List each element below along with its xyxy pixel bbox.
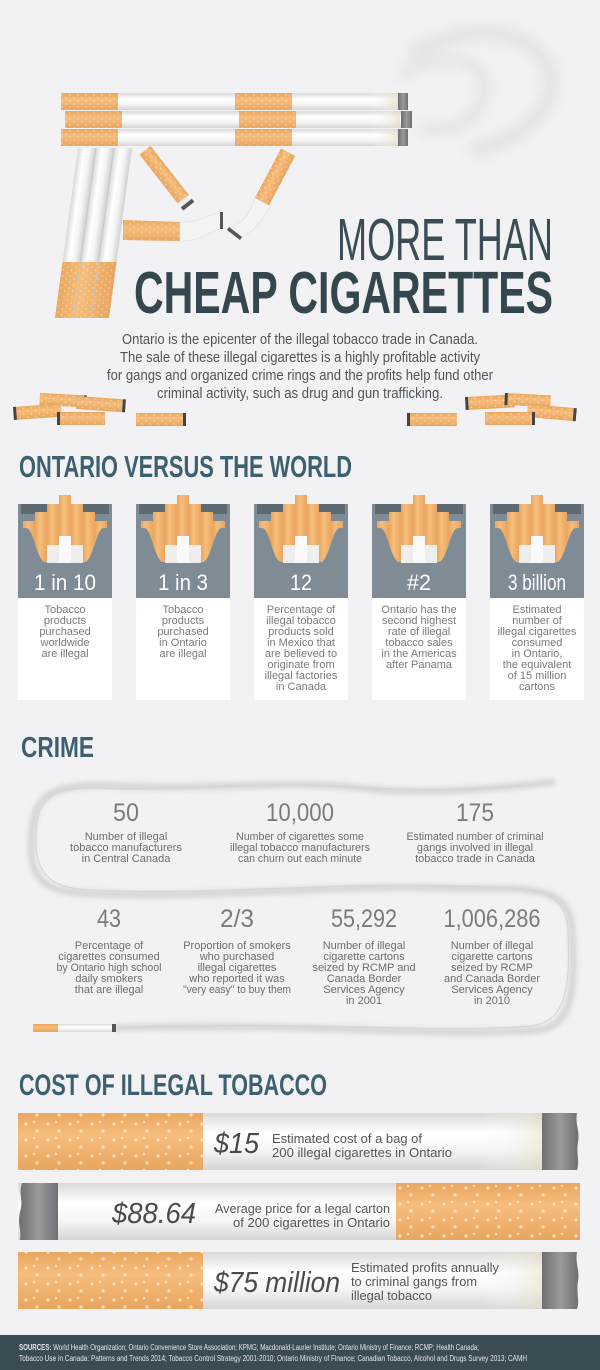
stat: 2/3: illegal cigarettes xyxy=(198,962,277,974)
intro paragraph: criminal activity, such as drug and gun trafficking. xyxy=(157,385,443,402)
panel: 1 in 3: in Ontario xyxy=(159,637,207,649)
panel: 1 in 10 xyxy=(18,495,112,700)
panel: 3 billion: consumed xyxy=(512,637,562,649)
stat: 55,292: Number of illegal xyxy=(323,940,405,952)
stat: 1,006,286: 1,006,286 xyxy=(444,905,540,933)
panel: 12: Percentage of xyxy=(267,604,336,616)
panel: 1 in 10: 1 in 10 xyxy=(34,570,96,595)
panel: 1 in 10: products xyxy=(44,615,87,627)
stat: 175: tobacco trade in Canada xyxy=(415,853,536,865)
stat: 175: gangs involved in illegal xyxy=(417,842,533,854)
panel: 1 in 3: Tobacco xyxy=(163,604,203,616)
heading: Ontario versus the world: ONTARIO VERSUS THE WORLD xyxy=(19,449,352,484)
intro paragraph xyxy=(107,331,493,402)
panel: #2 xyxy=(372,495,466,700)
intro paragraph: Ontario is the epicenter of the illegal tobacco trade in Canada. xyxy=(122,331,478,348)
illustration: cigarette gun xyxy=(55,93,412,318)
panel: #2: second highest xyxy=(382,615,456,627)
stat: 50: 50 xyxy=(113,799,139,827)
stat: 55,292: in 2001 xyxy=(346,995,382,1007)
crime stats row 1 xyxy=(70,799,544,865)
stat: 43 xyxy=(56,905,162,996)
cost bar: $15: Estimated cost of a bag of xyxy=(272,1131,422,1146)
stat: 10,000: can churn out each minute xyxy=(238,853,362,865)
intro paragraph: The sale of these illegal cigarettes is a highly profitable activity xyxy=(120,349,480,366)
stat: 175: 175 xyxy=(456,799,494,827)
stat: 43: by Ontario high school xyxy=(56,962,162,974)
stat: 2/3: who purchased xyxy=(199,951,274,963)
panel: 12: are believed to xyxy=(265,648,337,660)
panel: 3 billion: cartons xyxy=(519,681,556,693)
panel: #2: rate of illegal xyxy=(388,626,450,638)
stat: 175 xyxy=(406,799,544,865)
gun grip xyxy=(55,148,132,318)
crime stats row 2 xyxy=(56,905,540,1007)
stat: 2/3: "very easy" to buy them xyxy=(183,984,291,996)
smoke trail around crime stats xyxy=(31,782,573,1032)
stat: 55,292: Canada Border xyxy=(327,973,402,985)
cost bar: $75 million: $75 million xyxy=(213,1267,340,1299)
stat: 2/3: 2/3 xyxy=(220,905,254,933)
panel: #2: after Panama xyxy=(386,659,453,671)
stat: 43: 43 xyxy=(97,905,121,933)
stat: 55,292 xyxy=(312,905,416,1007)
panel: 12: originate from xyxy=(267,659,335,671)
stat: 50: Number of illegal xyxy=(85,831,167,843)
heading: cost of illegal tobacco: COST OF ILLEGAL TOBACCO xyxy=(19,1069,327,1102)
panel: 3 billion: the equivalent xyxy=(503,659,571,671)
stat: 50 xyxy=(70,799,182,865)
broken cigarettes xyxy=(123,149,295,241)
panel: 3 billion: 3 billion xyxy=(508,570,566,595)
panel: 3 billion: of 15 million xyxy=(508,670,566,682)
cost bar: $88.64 xyxy=(18,1183,580,1240)
cost bar: $75 million xyxy=(18,1252,578,1309)
panel: 12: in Mexico that xyxy=(267,637,335,649)
panel: 1 in 10: purchased xyxy=(39,626,91,638)
stat: 43: daily smokers xyxy=(75,973,143,985)
panel: #2: in the Americas xyxy=(381,648,457,660)
cost bar: $15: $15 xyxy=(213,1128,260,1160)
cost bar: $15 xyxy=(18,1113,578,1170)
stat: 43: Percentage of xyxy=(75,940,144,952)
cost bar: $88.64: Average price for a legal carton xyxy=(215,1201,390,1216)
panel: #2: Ontario has the xyxy=(381,604,457,616)
panel: 3 billion: in Ontario, xyxy=(512,648,562,660)
panel: #2: #2 xyxy=(407,570,431,595)
panel: 1 in 3: 1 in 3 xyxy=(158,570,208,595)
panel: 1 in 3: purchased xyxy=(157,626,209,638)
panel: 12 xyxy=(254,495,348,700)
stat: 2/3 xyxy=(183,905,291,996)
cigarette butts pile xyxy=(13,393,577,426)
stat: 50: tobacco manufacturers xyxy=(70,842,182,854)
panel: 1 in 3 xyxy=(136,495,230,700)
stat: 10,000 xyxy=(230,799,370,865)
stat: 55,292: cigarette cartons xyxy=(323,951,405,963)
heading: crime: CRIME xyxy=(21,732,94,764)
panel: 3 billion: Estimated xyxy=(513,604,561,616)
panel: 3 billion: number of xyxy=(512,615,563,627)
stat: 1,006,286 xyxy=(444,905,540,1007)
panel: 12: products sold xyxy=(268,626,334,638)
cost bar: $75 million: Estimated profits annually xyxy=(351,1260,499,1275)
panel: 3 billion xyxy=(490,495,584,700)
cost bar: $15: 200 illegal cigarettes in Ontario xyxy=(272,1145,452,1160)
stat: 1,006,286: cigarette cartons xyxy=(451,951,533,963)
panel: 1 in 3: products xyxy=(162,615,205,627)
icon: small burning cigarette xyxy=(33,1024,116,1032)
smoke: top right xyxy=(400,33,551,150)
stat: 175: Estimated number of criminal xyxy=(406,831,544,843)
title xyxy=(134,207,553,326)
footer: sources xyxy=(0,1335,600,1370)
stat: 50: in Central Canada xyxy=(82,853,171,865)
footer: sources: SOURCES: World Health Organization; Ontario Convenience Store Association; KPMG; Macdonald-Laurier Institute; Ontario Ministry of Finance; RCMP; Health Canada; xyxy=(19,1343,479,1352)
intro paragraph: for gangs and organized crime rings and the profits help fund other xyxy=(107,367,493,384)
panel: 12: illegal factories xyxy=(265,670,338,682)
panel: 1 in 10: worldwide xyxy=(40,637,89,649)
panel: #2: tobacco sales xyxy=(385,637,453,649)
panel: 3 billion: illegal cigarettes xyxy=(498,626,577,638)
stat: 1,006,286: Services Agency xyxy=(451,984,533,996)
stat: 55,292: Services Agency xyxy=(323,984,405,996)
cost bar: $88.64: of 200 cigarettes in Ontario xyxy=(233,1215,390,1230)
panel: 1 in 10: are illegal xyxy=(41,648,89,660)
panel: 12: 12 xyxy=(290,570,312,595)
panel: 12: in Canada xyxy=(276,681,327,693)
stat: 43: that are illegal xyxy=(75,984,143,996)
stat: 2/3: who reported it was xyxy=(188,973,285,985)
stat: 1,006,286: Number of illegal xyxy=(451,940,533,952)
stat: 55,292: seized by RCMP and xyxy=(312,962,416,974)
cost bar: $88.64: $88.64 xyxy=(111,1198,196,1230)
stat: 43: cigarettes consumed xyxy=(58,951,160,963)
cost bar: $75 million: to criminal gangs from xyxy=(351,1274,477,1289)
stat: 2/3: Proportion of smokers xyxy=(183,940,291,952)
stat: 10,000: illegal tobacco manufacturers xyxy=(230,842,370,854)
panel: 1 in 10: Tobacco xyxy=(45,604,85,616)
stat: 10,000: 10,000 xyxy=(266,799,334,827)
cost bar: $75 million: illegal tobacco xyxy=(351,1288,432,1303)
stat: 10,000: Number of cigarettes some xyxy=(236,831,364,843)
trigger cigarette xyxy=(140,146,194,210)
stat: 1,006,286: seized by RCMP xyxy=(451,962,533,974)
stat: 1,006,286: and Canada Border xyxy=(444,973,540,985)
stat: 55,292: 55,292 xyxy=(331,905,397,933)
panel: 1 in 3: are illegal xyxy=(159,648,207,660)
panel: 12: illegal tobacco xyxy=(266,615,336,627)
stat: 1,006,286: in 2010 xyxy=(474,995,510,1007)
gun barrel: three cigarettes xyxy=(61,93,412,146)
